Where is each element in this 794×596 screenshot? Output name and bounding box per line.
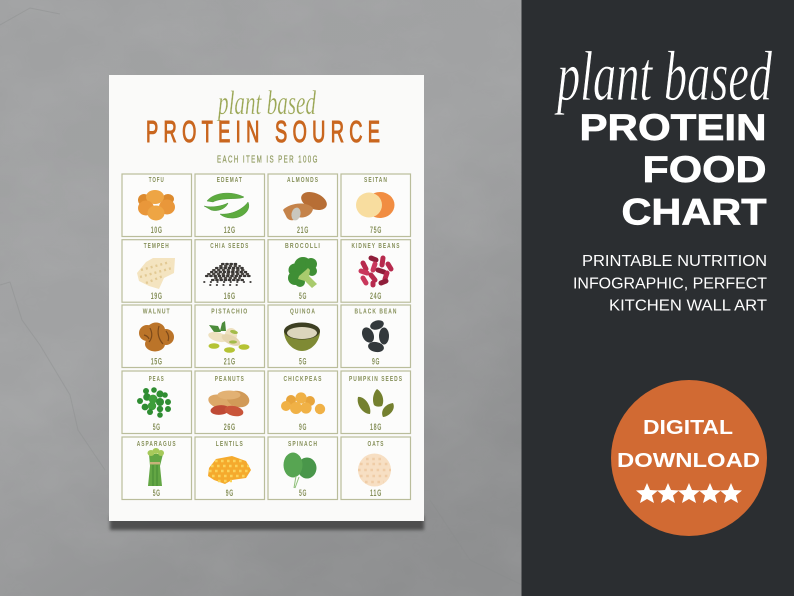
badge: digital download: DIGITAL	[643, 417, 733, 439]
card: walnut: WALNUT	[143, 306, 171, 316]
card: chickpeas	[268, 371, 338, 434]
icon: broccoli	[288, 257, 317, 288]
card: peanuts	[195, 371, 264, 434]
card: peanuts: 26G	[224, 422, 236, 433]
card: oats: 11G	[370, 488, 382, 499]
icon: quinoa bowl	[284, 322, 320, 351]
card: quinoa	[268, 305, 338, 368]
card: almonds	[268, 174, 338, 236]
icon: chia seed pile	[204, 264, 254, 285]
card: seitan	[341, 174, 410, 236]
card: lentils: LENTILS	[216, 439, 244, 448]
card: kidney beans: 24G	[370, 291, 382, 302]
poster subtitle: EACH ITEM IS PER 100G	[217, 153, 317, 165]
card: pistachio: PISTACHIO	[211, 306, 248, 316]
card: black bean: BLACK BEAN	[354, 306, 398, 316]
icon: pumpkin seeds	[358, 389, 394, 417]
card: tofu	[122, 174, 192, 236]
card: tempeh: TEMPEH	[144, 241, 170, 250]
card: tofu: TOFU	[149, 175, 165, 184]
card: asparagus: 5G	[153, 488, 161, 499]
icon: pistachios	[207, 321, 250, 353]
card: kidney beans	[341, 240, 410, 302]
sidebar script heading: plant based	[554, 37, 773, 116]
panel: dark sidebar	[522, 0, 794, 596]
card: pumpkin seeds: 18G	[370, 422, 382, 433]
icon: tofu cubes	[138, 190, 175, 220]
card: broccoli: BROCOLLI	[285, 241, 321, 250]
card: broccoli	[268, 240, 338, 302]
card: peas: 5G	[153, 422, 161, 433]
card: chickpeas: 9G	[299, 422, 307, 433]
poster title: PROTEIN SOURCE	[146, 115, 380, 149]
sidebar title: PROTEIN	[580, 106, 766, 148]
panel: poster paper	[109, 75, 424, 521]
card: chickpeas: CHICKPEAS	[284, 374, 322, 383]
icon: black beans	[360, 319, 389, 353]
background: concrete surface	[0, 0, 522, 596]
icon: almonds	[283, 189, 330, 221]
icon: walnut	[139, 322, 174, 352]
card: almonds: ALMONDS	[287, 175, 319, 184]
poster script heading: plant based	[217, 84, 317, 122]
card: oats	[341, 437, 410, 500]
card: peas: PEAS	[149, 374, 165, 383]
card: tempeh	[122, 240, 192, 302]
sidebar description: INFOGRAPHIC, PERFECT	[573, 276, 768, 292]
icon: lentils pile	[208, 456, 251, 484]
card: pistachio: 21G	[224, 356, 236, 368]
card: black bean: 9G	[372, 356, 380, 368]
icon: seitan	[356, 192, 394, 218]
card: edamame: EDEMAT	[217, 175, 243, 184]
icon: peas	[137, 387, 171, 418]
card: chia seeds: CHIA SEEDS	[210, 241, 249, 250]
sidebar description: KITCHEN WALL ART	[609, 298, 768, 314]
card: quinoa: 5G	[299, 356, 307, 368]
sidebar description	[573, 253, 768, 314]
card: lentils	[195, 437, 264, 500]
card: spinach: 5G	[299, 488, 307, 499]
icon: edamame pods	[204, 193, 249, 218]
badge: digital download: DOWNLOAD	[617, 450, 760, 472]
icon: tempeh block	[137, 258, 175, 289]
card: oats: OATS	[368, 439, 384, 448]
card: seitan: SEITAN	[364, 175, 388, 184]
card: black bean	[341, 305, 410, 368]
card: seitan: 75G	[370, 225, 382, 236]
icon: peanuts	[207, 388, 251, 418]
card: edamame: 12G	[224, 225, 236, 236]
card: chia seeds: 16G	[224, 291, 236, 302]
icon: asparagus bundle	[148, 448, 164, 486]
card: pumpkin seeds	[341, 371, 410, 434]
sidebar title: FOOD	[642, 148, 766, 190]
card: pistachio	[195, 305, 264, 368]
card: broccoli: 5G	[299, 291, 307, 302]
card: chia seeds	[195, 240, 264, 302]
icon: chickpeas	[281, 392, 325, 414]
sidebar title	[580, 106, 767, 232]
card: walnut: 15G	[151, 356, 163, 368]
card: kidney beans: KIDNEY BEANS	[352, 241, 400, 250]
card: quinoa: QUINOA	[290, 306, 316, 316]
card: spinach	[268, 437, 338, 500]
card: walnut	[122, 305, 192, 368]
card: peas	[122, 371, 192, 434]
card: pumpkin seeds: PUMPKIN SEEDS	[349, 374, 403, 383]
badge: digital download	[611, 380, 767, 536]
card: spinach: SPINACH	[288, 439, 318, 448]
icon: oats pile	[358, 454, 391, 486]
icon: kidney beans	[361, 258, 391, 285]
sidebar title: CHART	[622, 190, 767, 232]
card: peanuts: PEANUTS	[215, 374, 245, 383]
sidebar description: PRINTABLE NUTRITION	[582, 253, 767, 270]
icon: spinach leaves	[284, 452, 316, 488]
icon: five stars	[636, 483, 742, 503]
card: asparagus: ASPARAGUS	[137, 439, 177, 448]
card: tempeh: 19G	[151, 291, 163, 302]
card: almonds: 21G	[297, 225, 309, 236]
card: lentils: 9G	[226, 488, 234, 499]
card: tofu: 10G	[151, 225, 163, 236]
paper shadow	[110, 516, 424, 530]
card: asparagus	[122, 437, 192, 500]
card: edamame	[195, 174, 264, 236]
